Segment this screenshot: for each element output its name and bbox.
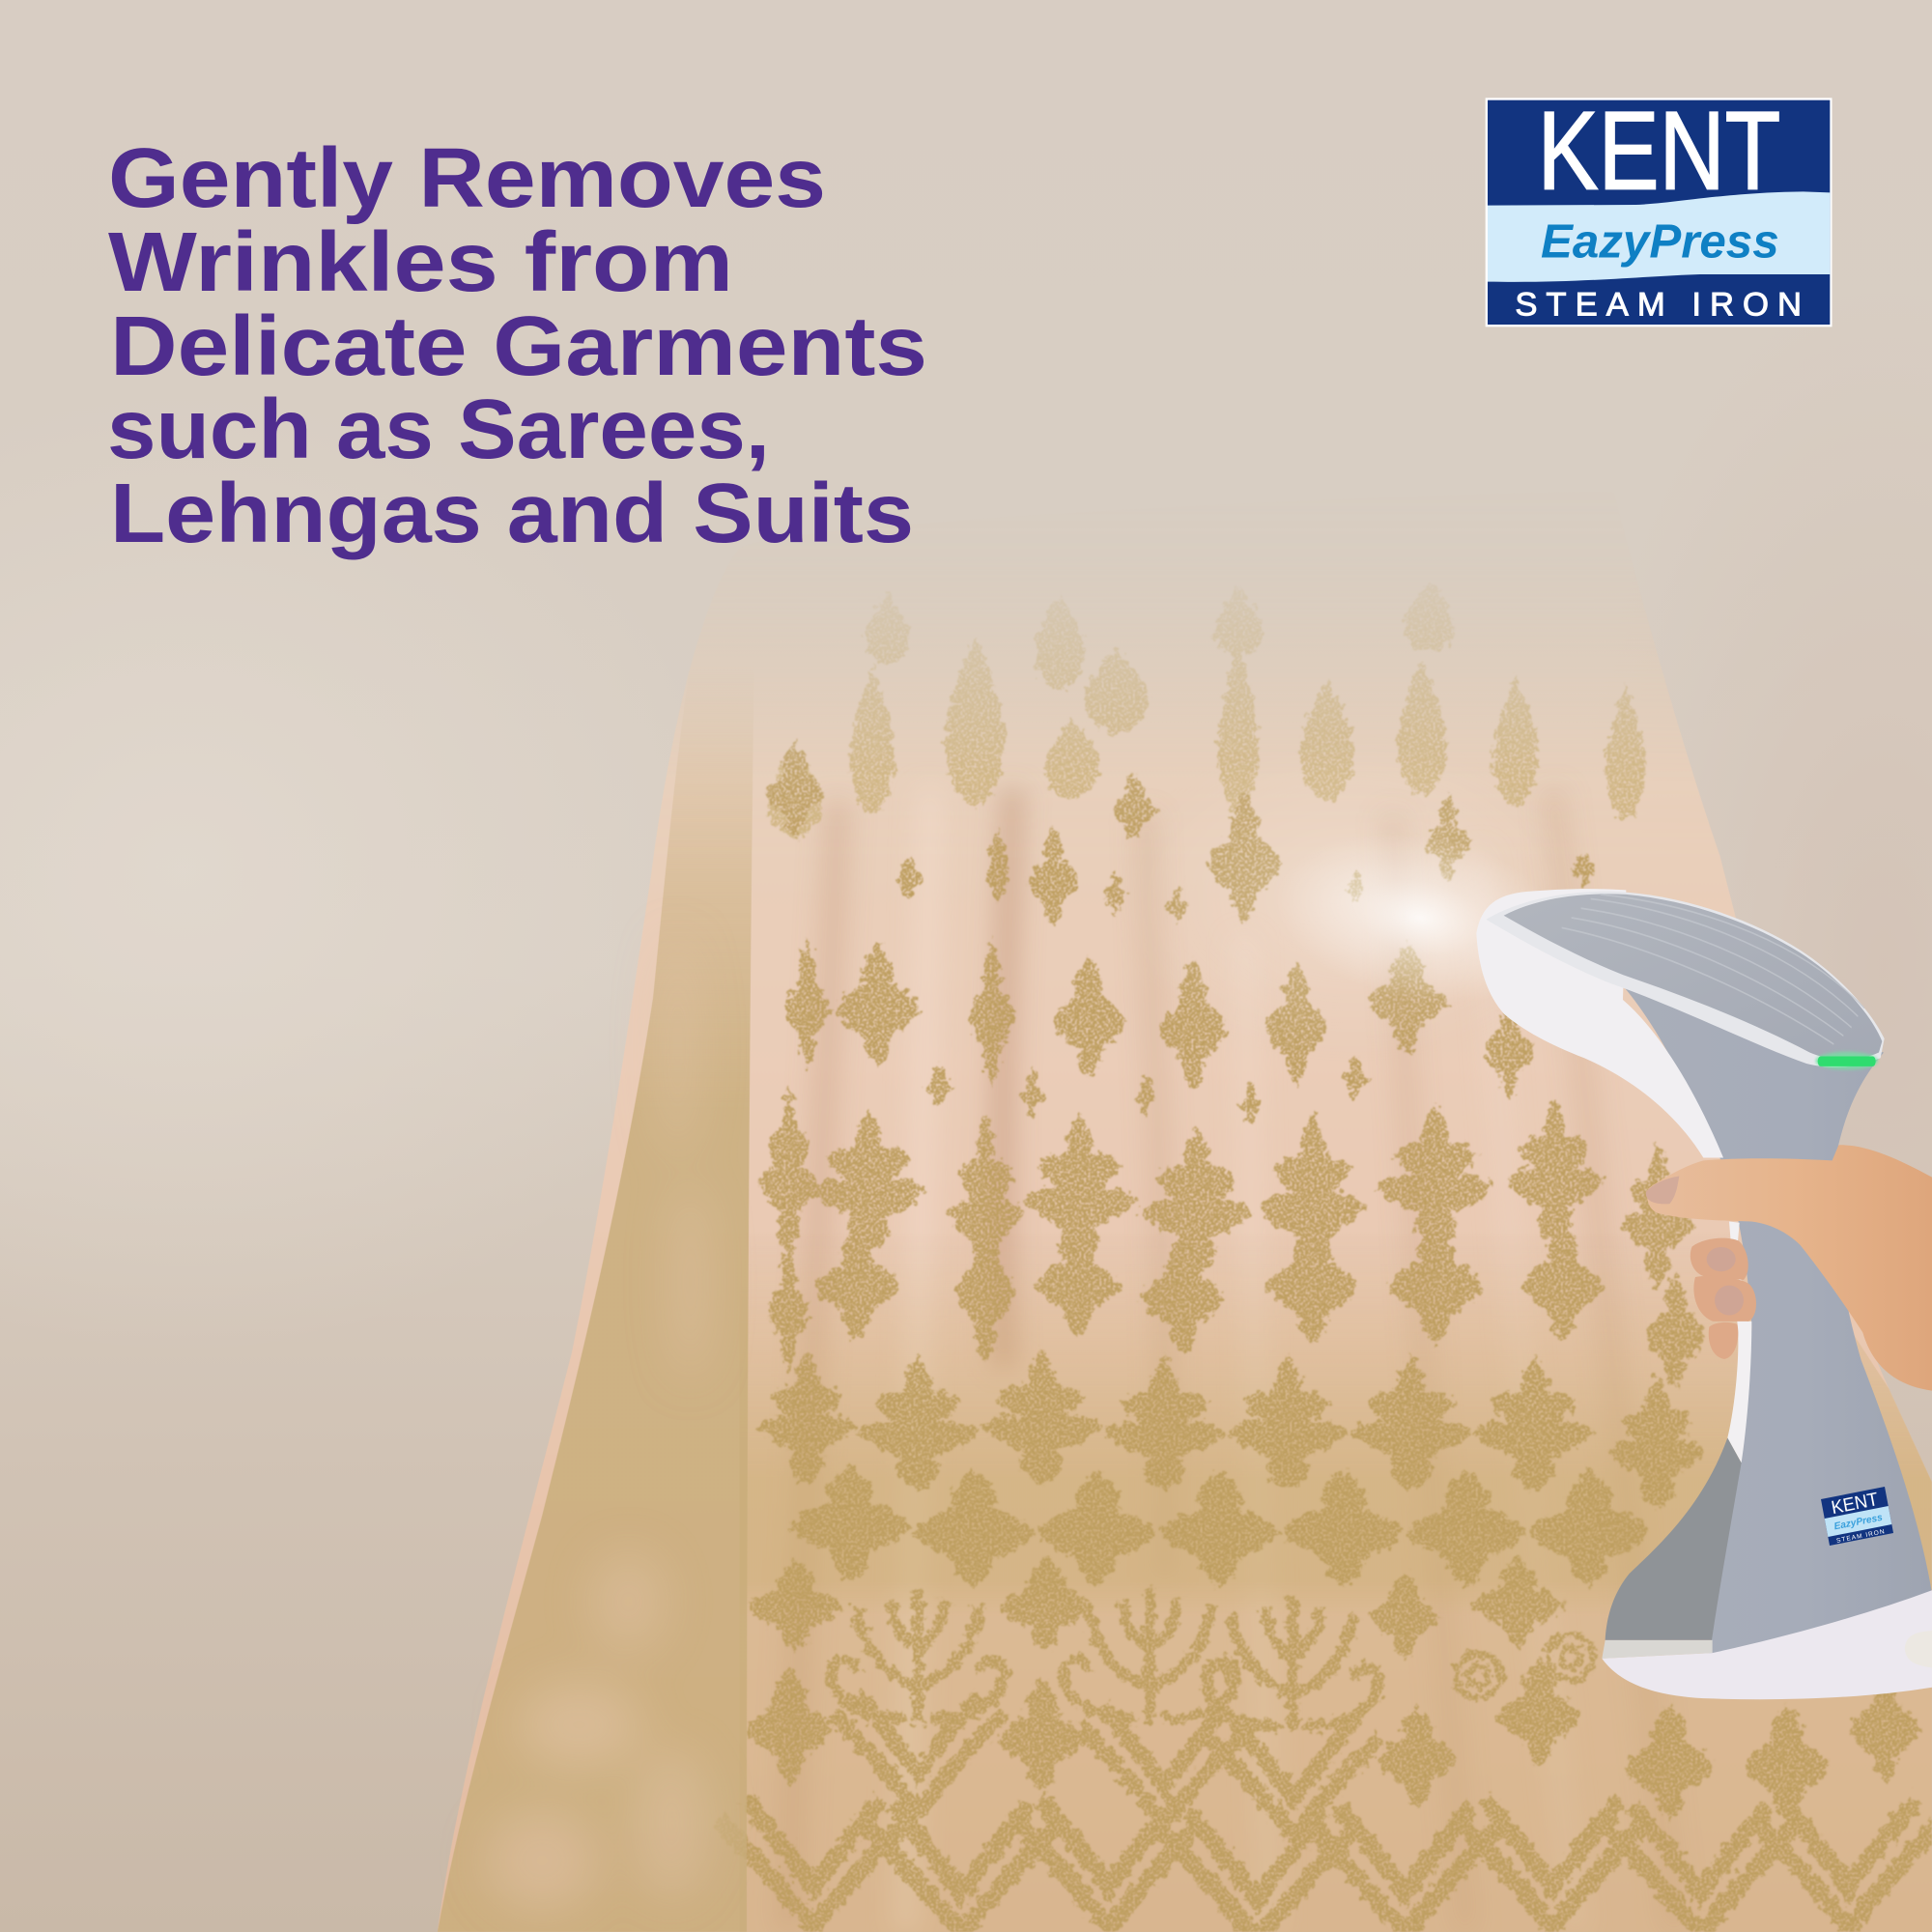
skirt left edge gold panel — [438, 666, 754, 1932]
logo steam iron line: STEAM IRON — [1515, 287, 1802, 324]
steam glow from nozzle — [1111, 734, 1594, 1063]
title line 2: Wrinkles from — [108, 215, 733, 309]
steamer grey ribbed top plate — [1486, 892, 1885, 1067]
skirt base fabric — [438, 682, 1932, 1932]
top flame motifs — [768, 579, 1645, 838]
small product logo on steamer — [1821, 1487, 1893, 1546]
finger nails — [1707, 1247, 1744, 1316]
hand thumb and palm — [1647, 1145, 1932, 1391]
small product logo on steamer: KENT — [1830, 1489, 1880, 1519]
title line 1: Gently Removes — [108, 131, 826, 225]
logo EazyPress wordmark: EazyPress — [1541, 216, 1779, 269]
brand logo: KENT EazyPress Steam Iron — [1486, 90, 1833, 327]
tree row — [760, 1084, 1693, 1288]
steamer white head shell — [1476, 889, 1723, 1158]
left panel pale blotches — [490, 1049, 705, 1909]
thumb nail — [1646, 1176, 1679, 1204]
title line 4: such as Sarees, — [107, 383, 770, 476]
small product logo on steamer: EazyPress — [1833, 1513, 1884, 1532]
logo light wave band — [1488, 191, 1830, 282]
logo KENT wordmark: KENT — [1538, 90, 1780, 213]
lower plant and scroll rows — [719, 1556, 1932, 1932]
garment: embroidered lehenga skirt — [438, 492, 1932, 1932]
product: handheld garment steamer held in hand — [1476, 889, 1932, 1699]
gold wash over lower skirt — [739, 1233, 1932, 1932]
gold embroidery motifs — [719, 579, 1932, 1932]
title line 3: Delicate Garments — [110, 299, 927, 393]
skirt folds — [788, 788, 1676, 1932]
steamer lower white trim strip — [1727, 1222, 1751, 1463]
steamer ribs — [1562, 895, 1864, 1044]
steamer body — [1610, 972, 1932, 1665]
steamer base strip — [1602, 1640, 1713, 1659]
steamer white base — [1602, 1590, 1932, 1699]
power cord plug — [1905, 1631, 1932, 1668]
upper flower row — [765, 741, 1596, 929]
second flower row — [769, 1213, 1705, 1390]
status green LED — [1815, 1052, 1878, 1069]
middle flower row — [784, 938, 1534, 1125]
steamer dark rear panel — [1605, 1437, 1742, 1640]
small product logo on steamer: STEAM IRON — [1836, 1528, 1886, 1545]
title line 5: Lehngas and Suits — [110, 467, 914, 560]
dense band row — [758, 1350, 1757, 1592]
hand fingers — [1690, 1238, 1756, 1359]
title heading — [107, 131, 927, 560]
